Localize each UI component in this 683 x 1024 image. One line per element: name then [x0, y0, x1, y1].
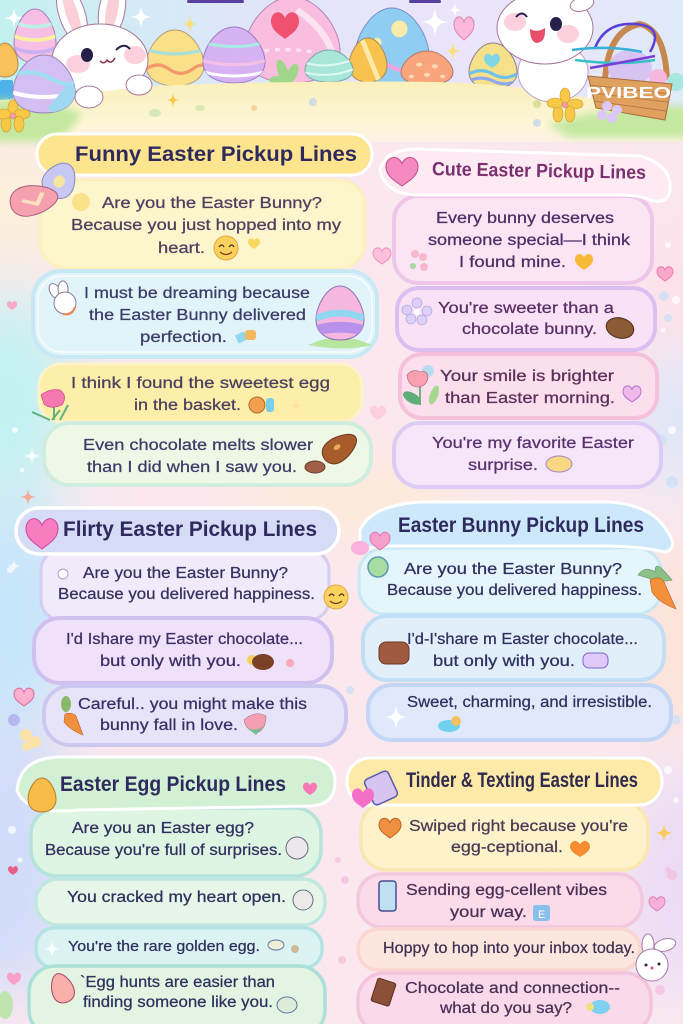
icon: heart left — [7, 301, 17, 310]
blue and lilac egg — [13, 55, 75, 113]
icon: small egg — [268, 940, 284, 950]
tinder line 1 card — [361, 802, 648, 870]
line text — [71, 375, 330, 414]
line text: someone special—I think — [428, 232, 630, 249]
blue box — [0, 80, 13, 104]
icon: chocolate piece — [305, 461, 325, 473]
line text: I'd-I'share m Easter chocolate... — [407, 631, 638, 648]
icon: pink egg — [47, 970, 77, 1006]
panel: tinder and texting easter lines — [347, 758, 677, 1024]
icon: decorated eggs — [8, 156, 83, 219]
line text — [84, 285, 310, 346]
line text: Chocolate and connection-- — [405, 980, 620, 997]
line text: Because you're full of surprises. — [45, 842, 282, 859]
line text: Careful.. you might make this — [78, 696, 307, 713]
line text: `Egg hunts are easier than — [80, 974, 275, 991]
icon: pink heart — [352, 788, 374, 808]
pink striped egg — [14, 9, 56, 63]
icon: carrot — [61, 696, 83, 735]
icon: tulip and leaves — [401, 365, 441, 407]
lilac flower — [597, 101, 622, 123]
funny line 4 card — [44, 423, 371, 485]
line text — [407, 631, 638, 670]
line text: than Easter morning. — [445, 390, 615, 407]
yellow and blue egg — [469, 43, 517, 89]
icon: pearl egg — [286, 837, 308, 859]
line text: heart. — [158, 240, 205, 257]
header illustration — [0, 0, 683, 142]
line text: the Easter Bunny delivered — [89, 307, 306, 324]
panel: easter bunny pickup lines — [351, 502, 676, 740]
purple top scraps — [187, 0, 441, 3]
line text — [405, 980, 620, 1017]
icon: sparkle — [384, 705, 408, 729]
line text: surprise. — [468, 457, 538, 474]
background speckles — [7, 242, 680, 862]
heading: funny — [37, 134, 372, 175]
line text — [440, 368, 615, 407]
heading: cute: Cute Easter Pickup Lines — [432, 159, 646, 184]
tinder line 2 card — [358, 874, 642, 927]
line text: Your smile is brighter — [440, 368, 614, 385]
watermark swoosh — [572, 24, 655, 68]
icon: pink heart — [649, 897, 665, 911]
left bunny — [50, 0, 148, 96]
icon: smiling face — [214, 236, 238, 260]
line text: but only with you. — [433, 653, 575, 670]
icon: yellow heart at column edge — [370, 406, 386, 420]
icon: pink heart — [26, 519, 58, 549]
line text — [438, 300, 614, 338]
line text: Because you just hopped into my — [71, 217, 341, 234]
icon: letter E mug: E — [538, 909, 545, 921]
heading: flirty — [16, 508, 339, 554]
icon: cookie — [249, 397, 274, 413]
line text — [432, 435, 634, 474]
line text — [71, 195, 341, 257]
grass left and right — [0, 100, 683, 142]
lilac egg — [203, 27, 265, 83]
heading: bunny: Easter Bunny Pickup Lines — [398, 514, 644, 537]
funny line 2 card — [33, 271, 377, 357]
icon: gold heart — [575, 254, 593, 270]
line text: I think I found the sweetest egg — [71, 375, 330, 392]
icon: pink heart — [386, 157, 418, 186]
tinder line 3 card — [358, 929, 640, 970]
yellow-orange egg — [349, 38, 387, 82]
gold sparkle on hill — [167, 92, 179, 108]
panel: funny easter pickup lines — [8, 134, 377, 485]
icon: hearts — [351, 532, 390, 555]
cute line 4 card — [394, 423, 661, 487]
line text: Because you delivered happiness. — [387, 582, 642, 599]
icon: small egg — [277, 997, 297, 1013]
line text: your way. — [450, 904, 527, 921]
icon: pink flowers — [410, 250, 428, 271]
heading: bunny — [351, 502, 672, 555]
line text: chocolate bunny. — [462, 321, 597, 338]
green leaves between eggs — [269, 58, 301, 86]
heading: cute — [380, 149, 670, 201]
icon: star — [290, 400, 302, 412]
sky — [0, 0, 683, 112]
icon: chocolate — [379, 642, 409, 664]
icon: candy — [235, 330, 256, 344]
line text: Hoppy to hop into your inbox today. — [383, 940, 635, 957]
line text: I must be dreaming because — [84, 285, 310, 302]
right flower — [547, 88, 583, 122]
egg line 2 card — [36, 879, 325, 925]
icon: chocolate bar — [604, 315, 636, 341]
line text: in the basket. — [134, 397, 241, 414]
line text: finding someone like you. — [83, 994, 273, 1011]
icon: leaf at bottom left — [0, 991, 13, 1019]
icon: blue candy — [586, 1000, 610, 1014]
icon: speech bubble — [583, 653, 608, 668]
sparkles — [4, 3, 462, 36]
heading: egg — [17, 757, 335, 812]
left flower — [0, 100, 30, 132]
hill — [0, 82, 683, 142]
line text: Are you an Easter egg? — [72, 820, 254, 837]
line text: Swiped right because you're — [409, 818, 628, 835]
gold sparkles — [183, 15, 460, 60]
small pink heart — [454, 17, 474, 40]
watermark text: PVIBEO — [586, 85, 671, 102]
orange egg at left edge — [0, 43, 18, 77]
flirty line 3 card — [44, 686, 346, 745]
line text — [80, 974, 275, 1011]
icon: sparkle — [44, 941, 60, 957]
funny line 3 card — [32, 364, 362, 422]
line text: You're sweeter than a — [438, 300, 614, 317]
heading: egg: Easter Egg Pickup Lines — [60, 773, 286, 796]
orange egg — [401, 51, 453, 85]
egg line 4 card — [29, 966, 325, 1024]
line text: what do you say? — [439, 1000, 572, 1017]
egg line 3 card — [36, 928, 322, 968]
icon: smiling face — [324, 585, 348, 609]
line text — [78, 696, 307, 734]
heart on pink egg — [271, 12, 299, 39]
icon: golden egg — [28, 778, 56, 812]
line text: I found mine. — [459, 254, 566, 271]
blue egg — [355, 8, 429, 84]
line text — [58, 565, 315, 603]
icon: small bunny — [47, 281, 76, 314]
mint egg — [305, 50, 353, 82]
icon: heart between columns — [373, 248, 391, 264]
icon: orange heart — [379, 818, 401, 838]
line text: perfection. — [140, 329, 227, 346]
line text — [83, 437, 313, 476]
bunny line 2 card — [363, 616, 664, 680]
icon: blue candy — [438, 716, 461, 732]
cute line 2 card — [397, 288, 655, 350]
line text — [409, 818, 628, 856]
icon: left side hearts — [7, 866, 21, 985]
line text: You're my favorite Easter — [432, 435, 634, 452]
icon: phone — [379, 881, 396, 911]
icon: yellow blob — [72, 193, 90, 211]
left bunny paws — [75, 75, 152, 108]
cute line 1 card — [394, 196, 652, 283]
line text: Sweet, charming, and irresistible. — [407, 694, 652, 711]
line text: Every bunny deserves — [436, 210, 614, 227]
heading: flirty: Flirty Easter Pickup Lines — [63, 518, 317, 541]
flirty line 1 card — [41, 550, 348, 620]
line text — [45, 820, 282, 859]
line text: You're the rare golden egg. — [68, 939, 260, 955]
icon: star — [20, 489, 36, 505]
panel: flirty easter pickup lines — [8, 508, 348, 751]
icon: chocolate — [247, 654, 274, 670]
line text: Are you the Easter Bunny? — [83, 565, 288, 582]
icon: pink heart — [303, 783, 317, 795]
icon: candy egg — [546, 456, 572, 472]
icon: pearl egg — [293, 890, 313, 910]
panel: cute easter pickup lines — [380, 149, 670, 487]
icon: painted egg on grass — [308, 286, 372, 348]
icon: small flowers — [8, 714, 41, 751]
flirty line 2 card — [34, 618, 332, 683]
icon: chocolate egg — [318, 427, 362, 469]
icon: letter E mug — [533, 905, 550, 921]
tinder line 4 card — [358, 973, 651, 1024]
icon: orange heart small — [570, 841, 590, 857]
icon: pink bead — [286, 659, 294, 667]
heading: tinder — [347, 758, 662, 808]
line text: Because you delivered happiness. — [58, 586, 315, 603]
line text — [428, 210, 630, 271]
line text — [406, 882, 607, 921]
cute line 3 card — [400, 354, 657, 418]
line text — [387, 561, 642, 599]
icon: yellow heart — [248, 238, 260, 249]
funny line 1 card — [40, 180, 365, 268]
icon: gold sparkle — [655, 824, 673, 842]
icon: lilac flower — [402, 298, 432, 325]
heart on yellow egg — [484, 54, 500, 68]
line text: Are you the Easter Bunny? — [404, 561, 622, 578]
line text: I'd Ishare my Easter chocolate... — [66, 631, 303, 648]
icon: cloud — [58, 569, 68, 579]
yellow egg — [146, 30, 210, 86]
panel: easter egg pickup lines — [0, 757, 335, 1024]
basket — [588, 24, 683, 120]
line text: Sending egg-cellent vibes — [406, 882, 607, 899]
line text: Are you the Easter Bunny? — [102, 195, 322, 212]
big pink egg — [244, 0, 340, 83]
line text — [66, 631, 303, 670]
line text: bunny fall in love. — [100, 717, 238, 734]
icon: floating heart — [14, 688, 34, 706]
line text: You cracked my heart open. — [67, 889, 286, 906]
bunny line 3 card — [368, 685, 671, 740]
line text: than I did when I saw you. — [87, 459, 297, 476]
line text: egg-ceptional. — [451, 839, 563, 856]
icon: blue-green heart — [368, 557, 388, 577]
icon: heart right — [657, 267, 673, 281]
line text: but only with you. — [100, 653, 241, 670]
heading: funny: Funny Easter Pickup Lines — [75, 143, 357, 166]
icon: phone — [363, 770, 399, 806]
right bunny — [497, 0, 595, 102]
line text: Even chocolate melts slower — [83, 437, 313, 454]
icon: small bunny — [636, 934, 677, 981]
icon: cupcake — [244, 714, 266, 735]
trail decorations on hill — [149, 98, 541, 127]
icon: tiny charm — [291, 945, 299, 953]
icon: tulip — [32, 390, 68, 420]
decorative hearts around columns — [7, 248, 673, 505]
egg line 1 card — [31, 808, 321, 876]
icon: carrot — [638, 566, 676, 609]
bunny line 1 card — [359, 548, 676, 614]
icon: chocolate bar — [371, 978, 396, 1007]
icon: heart — [623, 386, 641, 402]
